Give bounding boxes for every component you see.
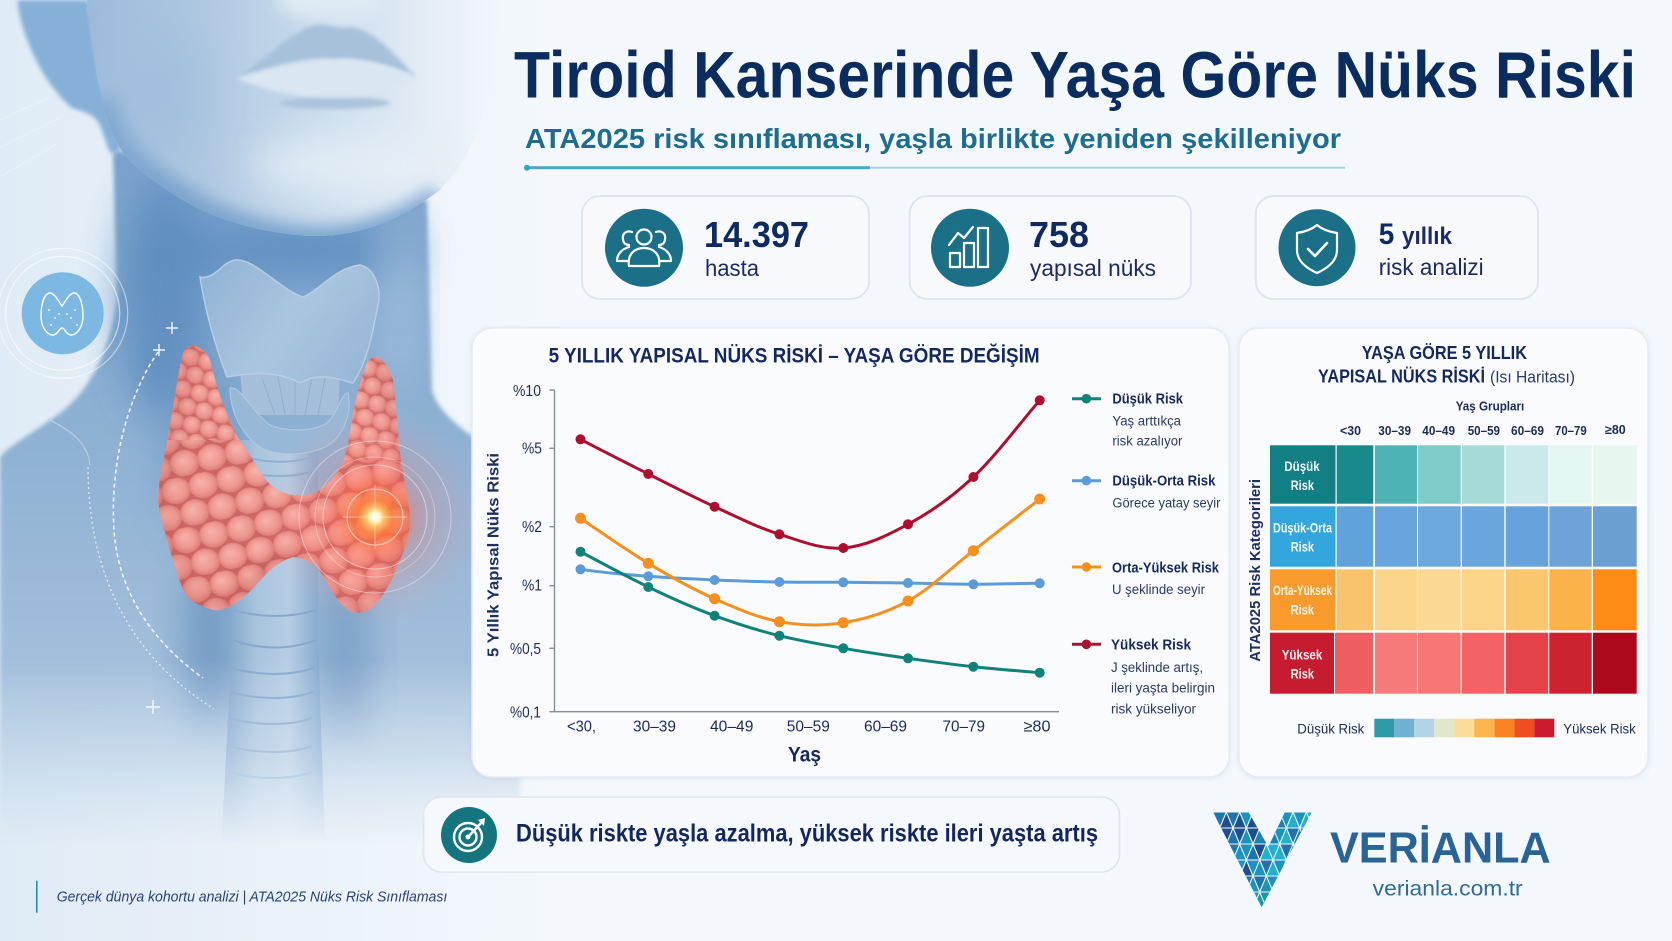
legend: high risk: risk yükseliyor [1111, 701, 1197, 716]
heat map title: (Isı Haritası) [1490, 367, 1575, 386]
colour scale legend: Yüksek Risk [1563, 720, 1637, 736]
neck shading [120, 180, 420, 740]
stat value: 5 [1379, 218, 1394, 251]
y axis labels [510, 383, 542, 721]
y axis labels: %1 [522, 578, 542, 595]
column labels: ≥80 [1605, 423, 1626, 437]
heat map title: YAPISAL NÜKS RİSKİ [1318, 366, 1485, 386]
legend: intermediate-high risk: U şeklinde seyir [1112, 582, 1205, 597]
stat card: structural recurrences [910, 196, 1191, 299]
y axis labels: %10 [513, 383, 541, 400]
column labels: 50–59 [1468, 424, 1500, 438]
heat map row: high [1270, 633, 1637, 694]
stat label: hasta [705, 255, 759, 281]
column labels: 30–39 [1378, 424, 1411, 438]
column labels: 70–79 [1555, 424, 1587, 438]
panel: heat map [1239, 328, 1648, 777]
icon: shield [1278, 209, 1356, 286]
x axis labels: 70–79 [942, 719, 985, 736]
footer note: Gerçek dünya kohortu analizi | ATA2025 Nüks Risk Sınıflaması [57, 890, 447, 906]
logo wordmark: VERİANLA [1330, 824, 1551, 873]
x axis labels: ≥80 [1024, 719, 1051, 736]
column group title: Yaş Grupları [1456, 399, 1524, 414]
legend: low-intermediate risk: Düşük-Orta Risk [1112, 473, 1216, 489]
face lower half [87, 0, 460, 236]
stat value: 14.397 [704, 214, 809, 255]
x axis labels: <30, [567, 719, 596, 736]
panel: line chart [472, 328, 1229, 777]
heat map row: low-intermediate: Risk [1291, 539, 1314, 555]
neck and shoulders [0, 149, 521, 820]
technical overlay arcs [0, 97, 214, 714]
heat map row: intermediate-high [1270, 569, 1637, 630]
y axis title: ATA2025 Risk Kategorileri [1247, 479, 1264, 662]
heat map row: high: Risk [1291, 666, 1314, 682]
heat map row: low: Risk [1291, 477, 1314, 493]
y axis labels: %0,1 [510, 704, 541, 721]
logo: Verianla [1213, 812, 1551, 908]
stat card: patients [582, 196, 869, 299]
legend: low risk: Düşük Risk [1112, 391, 1184, 407]
legend: high risk: Yüksek Risk [1111, 637, 1192, 653]
column labels: 60–69 [1511, 424, 1544, 438]
heat map title: YAŞA GÖRE 5 YILLIK [1362, 343, 1527, 363]
series: intermediate-high risk [575, 494, 1045, 628]
heat map row: low: Düşük [1284, 458, 1320, 474]
heat map row: intermediate-high: Orta-Yüksek [1273, 582, 1332, 598]
x axis labels [567, 719, 1051, 736]
legend: high risk: ileri yaşta belirgin [1111, 681, 1215, 696]
x axis labels: 30–39 [633, 719, 676, 736]
y axis title: 5 Yıllık Yapısal Nüks Riski [486, 453, 502, 657]
stat value: 758 [1029, 214, 1089, 255]
ear [17, 0, 122, 153]
y axis labels: %2 [522, 519, 542, 536]
colour scale legend [1297, 719, 1637, 737]
icon: people [605, 209, 683, 287]
heat map row: intermediate-high: Risk [1291, 602, 1314, 618]
heat map row: low-intermediate [1270, 506, 1637, 567]
series: low-intermediate risk [576, 564, 1045, 589]
y axis labels: %0,5 [510, 641, 541, 658]
subtitle: ATA2025 risk sınıflaması, yaşla birlikte yeniden şekilleniyor [525, 123, 1341, 154]
legend: low risk: risk azalıyor [1112, 433, 1183, 448]
legend: intermediate-high risk: Orta-Yüksek Risk [1112, 560, 1220, 576]
x axis title: Yaş [788, 744, 821, 767]
thyroid gland [158, 345, 410, 613]
legend: intermediate-high risk [1072, 560, 1220, 597]
axes [550, 390, 1059, 712]
illustration: neck and thyroid anatomy [0, 0, 521, 832]
series: high risk [576, 395, 1045, 553]
x axis labels: 50–59 [787, 719, 830, 736]
legend: high risk: J şeklinde artış, [1111, 660, 1203, 675]
logo mark [1213, 812, 1320, 908]
legend: low risk: Yaş arttıkça [1112, 413, 1181, 428]
x axis labels: 60–69 [864, 719, 907, 736]
logo url: verianla.com.tr [1373, 878, 1523, 901]
icon: bar chart [931, 209, 1009, 287]
legend: high risk [1072, 637, 1215, 716]
tumour glow [265, 407, 485, 627]
subtitle rule [524, 165, 1345, 171]
stat label: yapısal nüks [1030, 255, 1156, 281]
heat map row: high: Yüksek [1282, 646, 1322, 662]
stat label: risk analizi [1379, 254, 1484, 280]
stat card: five-year analysis [1256, 196, 1538, 299]
column labels [1340, 423, 1626, 438]
icon: target [441, 807, 497, 863]
column labels: <30 [1340, 424, 1361, 438]
thyroid cartilage [200, 260, 379, 454]
colour scale legend: Düşük Risk [1297, 720, 1365, 736]
y axis labels: %5 [522, 440, 542, 457]
legend: low risk [1072, 391, 1184, 448]
series: low risk [576, 547, 1045, 678]
callout text: Düşük riskte yaşla azalma, yüksek riskte ileri yaşta artış [516, 820, 1098, 848]
stat unit: yıllık [1402, 223, 1453, 250]
heat map row: low-intermediate: Düşük-Orta [1273, 520, 1332, 536]
icon: thyroid badge [0, 248, 128, 378]
heat map row: low [1270, 445, 1637, 504]
legend: low-intermediate risk: Görece yatay seyir [1112, 495, 1221, 510]
x axis labels: 40–49 [710, 719, 753, 736]
callout: key message [424, 797, 1120, 872]
legend: low-intermediate risk [1072, 473, 1221, 510]
trachea [223, 440, 324, 822]
chart title: 5 YILLIK YAPISAL NÜKS RİSKİ – YAŞA GÖRE DEĞİŞİM [549, 344, 1040, 368]
column labels: 40–49 [1422, 424, 1455, 438]
heat map title [1318, 343, 1575, 386]
lips [237, 25, 417, 78]
